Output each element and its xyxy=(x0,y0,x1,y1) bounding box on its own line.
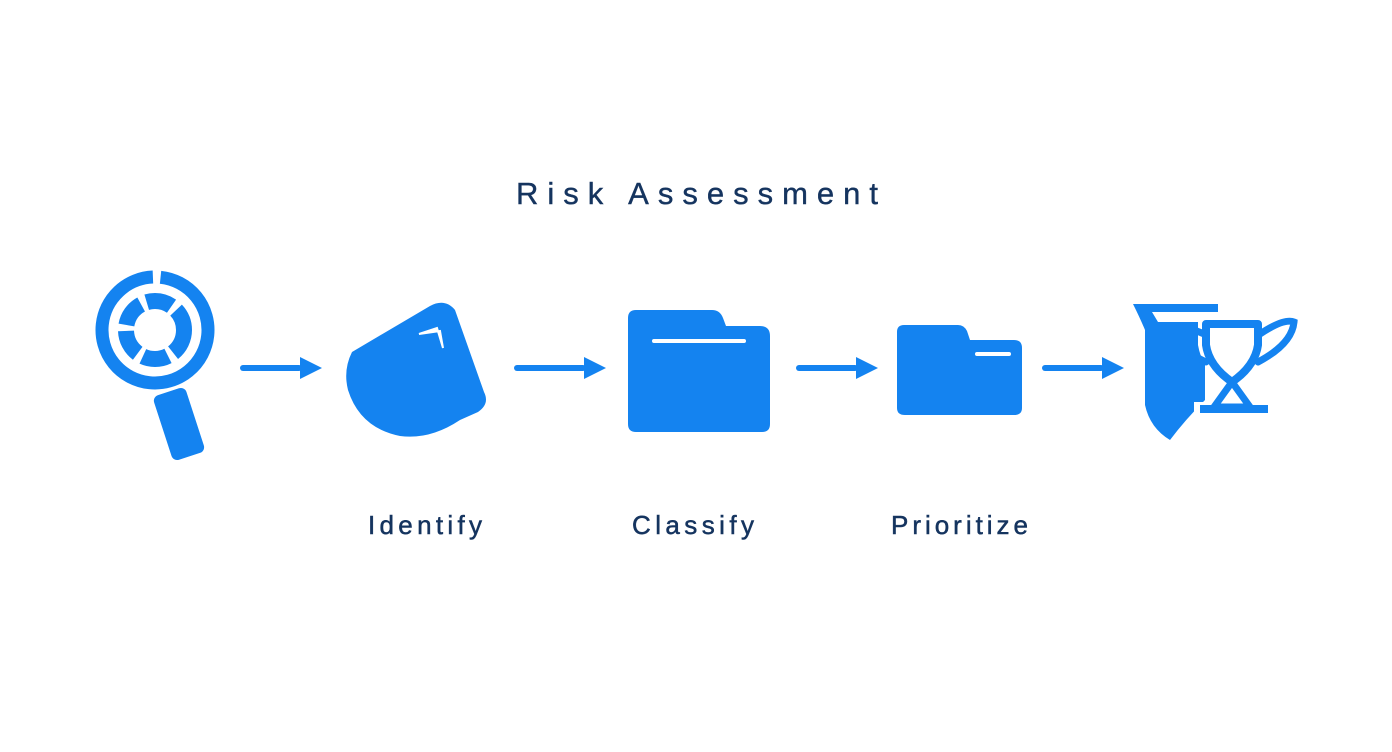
arrow 2 xyxy=(514,357,606,379)
label: Identify: Identify xyxy=(368,510,482,540)
label: Prioritize: Prioritize xyxy=(891,510,1028,540)
shield xyxy=(1133,304,1218,440)
arrow 3 xyxy=(796,357,878,379)
trophy white backing xyxy=(1194,316,1274,418)
icon: folder small xyxy=(897,325,1022,415)
icon: magnifier xyxy=(97,272,213,462)
arrow 4 xyxy=(1042,357,1124,379)
label: Classify: Classify xyxy=(632,510,754,540)
title: Risk Assessment xyxy=(516,176,878,211)
icon: shield and trophy xyxy=(1133,304,1294,440)
icon: folder large xyxy=(628,310,770,432)
trophy outline xyxy=(1206,324,1258,382)
arrow 1 xyxy=(240,357,322,379)
icon: identify shape xyxy=(346,303,486,437)
